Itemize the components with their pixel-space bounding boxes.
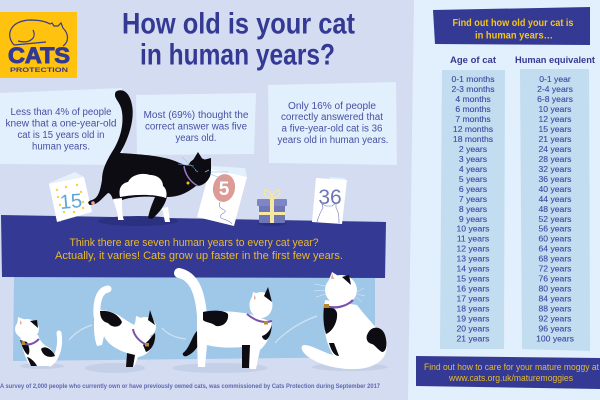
column: human equivalent: 44 years	[539, 194, 571, 204]
table header banner: in human years…	[475, 30, 553, 42]
icon: gift	[257, 190, 287, 226]
footer banner	[416, 356, 600, 389]
column: age of cat: 19 years	[457, 314, 489, 324]
column: age of cat: 18 years	[457, 304, 489, 314]
column: human equivalent: 40 years	[539, 184, 571, 194]
logo: Cats Protection: CATS	[8, 43, 70, 68]
column: age of cat: 3 years	[459, 154, 487, 164]
banner: seven human years	[1, 215, 386, 278]
column: human equivalent: 2-4 years	[537, 84, 573, 94]
column: human equivalent: 12 years	[539, 114, 571, 124]
column: age of cat: 5 years	[459, 174, 487, 184]
panel: stat 3: correctly answered that	[281, 112, 383, 123]
table header banner: Find out how old your cat is	[452, 18, 574, 29]
panel: stat 3	[268, 82, 397, 165]
footer banner: www.cats.org.uk/maturemoggies	[448, 373, 573, 384]
column: human equivalent: 60 years	[539, 234, 571, 244]
column: human equivalent: 10 years	[539, 104, 571, 114]
column: age of cat: 12 years	[457, 244, 489, 254]
column: human equivalent: 100 years	[536, 334, 574, 344]
panel: stat 3: Only 16% of people	[288, 101, 376, 112]
shadows under cats	[20, 363, 388, 373]
table header banner	[433, 7, 590, 45]
column: human equivalent	[520, 69, 590, 351]
panel: stat 3: years old in human years.	[278, 135, 388, 146]
panel: stat 1: Less than 4% of people	[10, 107, 112, 118]
column headings: Age of cat	[450, 55, 497, 66]
panel: stat 1: knew that a one-year-old	[6, 118, 116, 130]
swoosh lines	[69, 316, 317, 343]
column: age of cat: 6 years	[459, 184, 487, 194]
column: age of cat: 8 years	[459, 204, 487, 214]
column: human equivalent: 80 years	[539, 284, 571, 294]
illustration: senior cat	[302, 272, 387, 369]
card: balloon 5	[197, 166, 247, 226]
column: human equivalent: 56 years	[539, 224, 571, 234]
column headings: Human equivalent	[515, 55, 596, 66]
card: 15: 15	[59, 190, 83, 214]
column: human equivalent: 52 years	[539, 214, 571, 224]
column: age of cat: 11 years	[457, 234, 489, 244]
card: 36	[312, 177, 347, 224]
panel: stat 1: cat is 15 years old in	[18, 130, 104, 141]
column: human equivalent: 6-8 years	[537, 94, 573, 104]
column: age of cat: 16 years	[457, 284, 489, 294]
column: human equivalent: 21 years	[539, 134, 571, 144]
column: age of cat: 6 months	[455, 104, 491, 114]
column: human equivalent: 88 years	[539, 304, 571, 314]
footnote: A survey of 2,000 people who currently own or have previously owned cats, was commissioned by Cats Protection during September 2017	[0, 383, 381, 390]
column: age of cat: 4 months	[455, 94, 491, 104]
column: human equivalent: 32 years	[539, 164, 571, 174]
column: human equivalent: 84 years	[539, 294, 571, 304]
column: age of cat	[440, 70, 505, 349]
panel: stat 2	[136, 93, 256, 155]
column: human equivalent: 36 years	[539, 174, 571, 184]
column: human equivalent: 24 years	[539, 144, 571, 154]
column: human equivalent: 0-1 year	[539, 74, 571, 84]
illustration: kitten	[15, 317, 60, 366]
column: age of cat: 4 years	[459, 164, 487, 174]
column headings	[450, 55, 596, 66]
title: in human years?	[140, 38, 335, 72]
title: How old is your cat	[122, 8, 355, 40]
column: human equivalent: 48 years	[539, 204, 571, 214]
column: age of cat: 0-1 months	[452, 74, 494, 84]
column: age of cat: 9 years	[459, 214, 487, 224]
column: age of cat: 7 years	[459, 194, 487, 204]
panel: stat 2: correct answer was five	[145, 122, 247, 132]
column: age of cat: 18 months	[453, 134, 493, 144]
title	[122, 8, 355, 72]
column: age of cat: 12 months	[453, 124, 493, 134]
panel: stat 1: human years.	[32, 142, 90, 152]
banner: seven human years: Actually, it varies! Cats grow up faster in the first few years.	[55, 250, 343, 262]
column: age of cat: 13 years	[457, 254, 489, 264]
panel: age table	[408, 0, 600, 400]
column: human equivalent: 72 years	[539, 264, 571, 274]
illustration: young cat	[94, 289, 156, 367]
illustration: black cat	[88, 90, 228, 222]
panel: stat 1	[0, 88, 123, 165]
column: human equivalent: 64 years	[539, 244, 571, 254]
column: age of cat: 14 years	[457, 264, 489, 274]
column: age of cat: 15 years	[457, 274, 489, 284]
column: human equivalent: 15 years	[539, 124, 571, 134]
panel: stat 3: a five-year-old cat is 36	[282, 124, 383, 134]
card: 36: 36	[318, 186, 342, 209]
column: human equivalent: 76 years	[539, 274, 571, 284]
column: human equivalent: 92 years	[539, 314, 571, 324]
blue panel behind cats	[13, 277, 375, 361]
banner: seven human years: Think there are seven human years to every cat year?	[70, 237, 318, 249]
column: age of cat: 21 years	[457, 334, 489, 344]
card: balloon 5: 5	[219, 179, 230, 200]
column: age of cat: 20 years	[457, 324, 489, 334]
column: age of cat: 10 years	[457, 224, 489, 234]
panel: stat 2: Most (69%) thought the	[144, 110, 249, 121]
column: age of cat: 2 years	[459, 144, 487, 154]
column: human equivalent: 96 years	[539, 324, 571, 334]
column: human equivalent: 28 years	[539, 154, 571, 164]
logo: Cats Protection: PROTECTION	[10, 67, 69, 74]
column: human equivalent: 68 years	[539, 254, 571, 264]
panel: stat 2: years old.	[176, 133, 216, 144]
column: age of cat: 17 years	[457, 294, 489, 304]
illustration: adult cat	[179, 273, 272, 369]
logo: Cats Protection	[0, 12, 77, 78]
column: age of cat: 7 months	[455, 114, 491, 124]
card: 15	[49, 172, 92, 222]
column: age of cat: 2-3 months	[452, 84, 494, 94]
